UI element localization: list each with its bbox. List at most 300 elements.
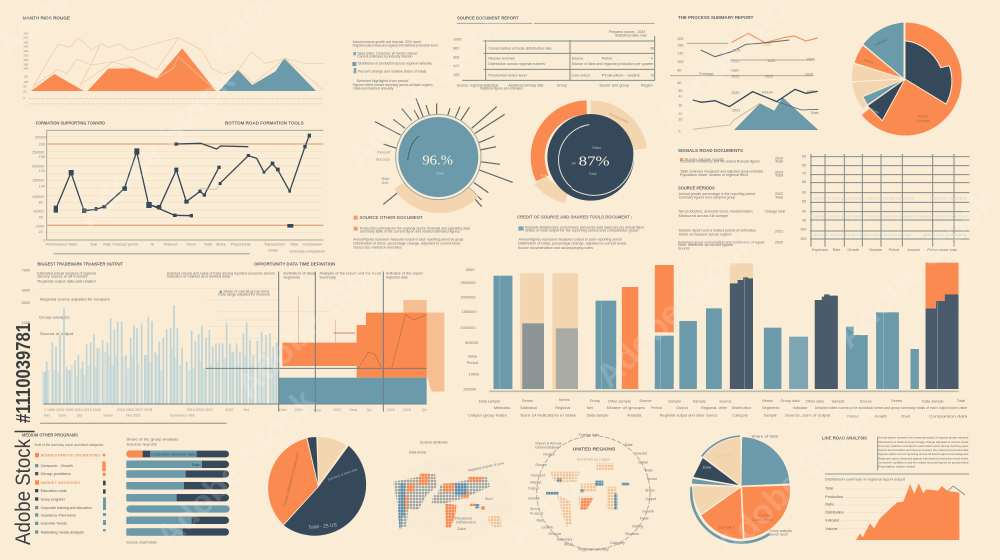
x labels: 2022 — [225, 408, 233, 412]
bar row 8 — [126, 528, 229, 536]
y labels: 1000000 — [461, 326, 475, 330]
spoke labels: Success — [376, 158, 390, 162]
headings: BOTTOM ROAD FORMATION TOOLS — [225, 120, 304, 126]
column rules — [279, 272, 383, 412]
legend left: Source documentation and notes — [353, 246, 402, 250]
teal land — [546, 478, 629, 509]
more entries: 2022 — [775, 192, 783, 196]
bars caption: Source chart totals — [126, 541, 157, 545]
left text block — [352, 40, 438, 90]
secondary bars — [43, 348, 275, 404]
bar 15 — [910, 349, 919, 389]
x labels: 2015 2016 2017 2018 — [117, 408, 152, 412]
legend: ADMINISTRATIVE OPERATIONS — [41, 452, 100, 457]
bar 11 — [789, 337, 808, 389]
top notes: Regional output data and related — [37, 279, 96, 283]
table text: % — [651, 73, 655, 77]
overlay line — [948, 486, 965, 495]
ring labels: Growth — [541, 525, 553, 529]
axis — [28, 97, 323, 100]
more entries: Net production, domestic trend, transformation — [679, 209, 753, 213]
top notes: Indicator of the report — [386, 271, 423, 275]
y labels: 300 — [800, 228, 806, 232]
panel: bottom right pie — [691, 434, 792, 543]
legend right: CREDIT OF SOURCE AND SHARED TOOLS DOCUMENT : — [517, 215, 633, 220]
x labels: Amount — [907, 248, 920, 252]
x labels: Detailed notes covering the statistical series and group summary totals of each output index value — [815, 406, 967, 410]
navy slice — [867, 79, 905, 121]
x labels: Data sample — [587, 414, 608, 418]
x labels: Statistical — [520, 406, 537, 410]
pie labels: Data — [703, 465, 712, 470]
pie labels: Annual — [918, 114, 929, 118]
segment labels: Annual share — [608, 112, 629, 124]
tan land — [488, 515, 502, 527]
more entries: Total — [775, 196, 783, 200]
heading: MEDIUM OTHER PROGRAMS — [22, 433, 79, 439]
tan slice lower — [852, 79, 905, 109]
faint row labels: period values — [923, 233, 967, 237]
ring labels: Import & Annual — [535, 442, 562, 446]
ring labels: Regional summary — [578, 548, 609, 552]
x axis labels: Summary comparison — [289, 250, 325, 254]
bar 7 — [679, 321, 697, 389]
entries — [680, 156, 783, 178]
pie notes: Group analysis — [769, 529, 792, 533]
grey land — [393, 473, 490, 527]
panel: bar column chart and blocks — [22, 261, 444, 423]
y labels: 3000 — [22, 289, 30, 293]
ring — [537, 436, 650, 549]
tan slice — [693, 486, 741, 514]
top notes: Estimated annual measure of regional — [37, 271, 96, 275]
stock id text — [12, 323, 35, 545]
gauge captions — [572, 146, 601, 176]
bar row 3 — [126, 470, 229, 478]
legend: Insurance Premiums — [41, 512, 76, 517]
faint row labels: sample record group entries noted across period values measured in grid range rows — [814, 214, 968, 218]
pie notes: Source report — [769, 533, 788, 537]
y axis numbers: 240 — [23, 45, 29, 49]
x axis labels: Detail — [268, 248, 278, 252]
stock id text: #1110039781 — [13, 323, 35, 423]
y labels: 70 — [802, 172, 806, 176]
headings: OPPORTUNITY DATA TIME DEFINITION — [254, 261, 336, 267]
y axis numbers: 260 — [23, 40, 29, 44]
x labels: Series — [522, 399, 533, 403]
map notes — [455, 461, 505, 531]
y axis numbers: Lorem ipsum dolor sit amet consectetur adipiscing elit sed do eiusmod tempor incididunt labore magna aliqua minim veniam quis nostrud exercitation ullamco laboris nisi aliquip commodo consequat duis aute irure dolor — [27, 101, 323, 105]
x axis labels: Total — [290, 242, 298, 246]
bar 16 stacked — [926, 263, 959, 389]
chart labels: Rate — [811, 111, 819, 115]
x labels: Series — [762, 399, 773, 403]
more entries: Summary figures from sampled group — [679, 196, 735, 200]
entries: Table summary measured and adjusted group estimate — [680, 169, 763, 173]
navy line lower — [693, 89, 818, 107]
top notes: Summary — [319, 275, 336, 279]
data series — [54, 134, 311, 228]
text block: Summary statistics recorded for each listed sector during reporting years — [878, 444, 969, 448]
stipple background — [393, 457, 513, 540]
entries: 2023 — [775, 170, 783, 174]
x labels: 2021 — [333, 408, 341, 412]
stock id text: Adobe Stock | — [12, 429, 35, 545]
y axis labels: 20 — [39, 230, 43, 234]
y axis numbers: 220 — [23, 49, 29, 53]
bar row 2: Ratio — [192, 463, 201, 467]
more entries: 2021 — [775, 229, 783, 233]
watermark: Adobe — [499, 454, 600, 556]
watermark: Adobe Stock — [69, 62, 243, 236]
orange slice left — [701, 487, 743, 539]
top notes: Source of output — [40, 332, 73, 336]
x labels: Qty — [77, 414, 83, 418]
y axis labels: 200000 — [32, 165, 44, 169]
ring labels: Services — [625, 532, 639, 536]
x labels: Other data — [806, 400, 825, 404]
y axis labels: 80 — [39, 200, 43, 204]
orange small slice — [854, 45, 904, 79]
chart labels: 2020 — [731, 91, 739, 95]
table text: Distribution across regional markets — [488, 62, 545, 66]
x labels: Set — [243, 408, 249, 412]
pie notes — [751, 434, 792, 537]
y axis numbers: 100 — [23, 80, 29, 84]
teal small slice — [692, 478, 740, 486]
y axis labels: 150000 — [32, 179, 44, 183]
y axis labels: 300 — [23, 31, 29, 35]
table text: 800 — [453, 47, 459, 51]
x axis labels: Planned — [164, 242, 177, 246]
table text: 400 — [453, 64, 459, 68]
top notes: Segments — [283, 275, 300, 279]
heading: SOURCE DOCUMENT REPORT — [457, 15, 519, 21]
teal land — [398, 483, 479, 528]
more entries — [678, 192, 785, 250]
ring labels: Share — [645, 489, 655, 493]
x axis labels: Share — [216, 242, 226, 246]
teal area — [219, 58, 316, 91]
teal mountain — [734, 97, 818, 130]
panel: horizontal bars and legend — [22, 433, 230, 545]
pie labels — [703, 453, 774, 529]
panel: top-right line charts — [670, 15, 819, 133]
segment labels — [540, 112, 629, 182]
y axis labels: 200 — [39, 142, 45, 146]
heading: THE PROCESS SUMMARY REPORT — [678, 15, 753, 21]
tan slice upper — [703, 437, 741, 486]
panel: text legends under gauges — [353, 215, 644, 250]
chart labels: 20 — [678, 112, 682, 116]
panel: right grid chart — [800, 154, 969, 252]
block bracket and rules — [825, 437, 969, 474]
chart labels: 100 — [677, 60, 683, 64]
navy large slice — [283, 445, 366, 536]
grid lines — [811, 154, 954, 247]
legend left: SOURCE OTHER DOCUMENT — [359, 215, 423, 220]
x labels: Data — [279, 408, 288, 412]
watermark: Adobe Stock — [149, 382, 323, 556]
table text: Production index level — [488, 73, 527, 77]
orange line — [732, 33, 818, 43]
orange land — [403, 473, 485, 527]
teal slice — [741, 437, 790, 486]
thin trend lines — [32, 38, 323, 90]
x labels: Share of groups — [606, 406, 645, 410]
map notes: Data — [457, 527, 467, 531]
map notes: Sum — [485, 497, 493, 501]
text block: Distribution of totals and percentage change adjusted to current levels — [878, 440, 969, 444]
table text: Production - metric — [602, 73, 640, 77]
faint row labels: sample record group entries noted across period values — [814, 196, 914, 200]
bar 6 stacked — [655, 265, 674, 389]
y axis numbers — [23, 36, 323, 105]
y labels — [800, 154, 806, 241]
legend: Marketing media analysis — [41, 529, 84, 534]
x labels: Net 2021 — [126, 414, 141, 418]
ring labels: Detail — [638, 460, 648, 464]
y labels: 55 — [802, 200, 806, 204]
gauge captions: Total — [589, 172, 597, 176]
y labels: Value — [468, 354, 477, 358]
chart labels: 40 — [678, 94, 682, 98]
heading: LINE ROAD ANALYSIS — [822, 436, 868, 442]
y labels: 60 — [802, 190, 806, 194]
entries: 2024 — [775, 156, 783, 160]
table text: Statistical data note — [615, 33, 647, 37]
legend: Executive Trends — [41, 521, 67, 526]
table text: 08 — [650, 46, 654, 50]
primary bars — [45, 305, 277, 404]
spoke labels — [376, 151, 390, 185]
x labels: Indicator — [793, 406, 808, 410]
subheading: Distribution summary of regional report output — [825, 478, 905, 482]
chart labels: 2023 — [765, 74, 773, 78]
y labels: 2000000 — [461, 296, 475, 300]
teal disc — [398, 117, 478, 197]
ring labels: Demonstration — [535, 446, 559, 450]
ring labels: Market — [530, 480, 542, 484]
entries: Consumer confidence and the related financial figures — [680, 160, 760, 164]
x labels: Number — [869, 248, 883, 252]
left text block: Data summarized annually — [353, 86, 393, 90]
x labels: Series — [891, 399, 902, 403]
legend: Consumer - Growth — [41, 463, 73, 468]
more entries: Summary group consumption and distribution of report — [678, 240, 764, 244]
x labels: Sample — [693, 400, 706, 404]
pie labels: Group distribution of totals and — [282, 452, 300, 506]
bar row 2 — [126, 461, 229, 468]
table text: Statistical figures and estimated — [480, 86, 523, 90]
panel: dark donut gauge — [538, 107, 640, 201]
x labels: Period — [651, 406, 662, 410]
chart labels: 2019 — [732, 49, 740, 53]
x labels: Other sample — [608, 400, 631, 404]
top notes: Definition of data — [283, 271, 316, 275]
panel: bottom right text and area chart — [822, 436, 969, 540]
reference lines — [47, 144, 323, 225]
bars heading: Source reports — [126, 443, 157, 447]
spoke labels: Percent — [377, 151, 390, 155]
y labels: 1000 — [22, 321, 30, 325]
top notes: Indicator of market and related data — [167, 274, 231, 278]
x labels: Group — [590, 399, 600, 403]
x labels: Regional, other — [701, 406, 728, 410]
y axis labels: 150 — [39, 155, 45, 159]
x labels: Net — [587, 406, 594, 410]
x labels: Growth — [874, 415, 887, 419]
x labels: Data sample — [479, 400, 500, 404]
x axis labels: Trend — [186, 242, 195, 246]
faint row labels — [814, 196, 968, 237]
x labels: Sample — [764, 414, 777, 418]
table text: Prepared source - 2024 — [609, 30, 645, 34]
y axis labels: 100 — [39, 184, 45, 188]
tan segment lower — [540, 180, 567, 197]
table text: Group — [557, 83, 567, 87]
x labels: Distribution — [732, 406, 751, 410]
table text: Additional summary data — [508, 83, 544, 87]
navy line upper — [701, 40, 789, 57]
side labels: Indicator — [825, 519, 840, 523]
dotted guides — [837, 489, 913, 529]
ring labels: Foreign data — [579, 433, 600, 437]
y labels: Period — [467, 361, 478, 365]
x labels: Net — [44, 414, 50, 418]
faint row labels: sample record group entries noted across period — [814, 233, 911, 237]
panel: top-left area chart — [23, 16, 323, 99]
radial spokes — [375, 98, 513, 207]
y axis numbers: 180 — [23, 58, 29, 62]
faint bar chart rows — [37, 288, 330, 338]
bar 2 stacked — [520, 273, 544, 389]
x axis labels: Transactions — [264, 242, 285, 246]
y labels: 45 — [802, 218, 806, 222]
map labels: Dynamic distribution — [420, 441, 448, 445]
top notes — [37, 271, 423, 336]
chart labels: 2025 — [805, 73, 813, 77]
heading rules — [457, 22, 655, 25]
inner arcs — [559, 125, 589, 188]
more entries: Sample report and a related period of estimates — [679, 229, 756, 233]
x labels: Group data — [780, 399, 801, 403]
table text: 4 — [651, 56, 653, 60]
watermark: Adobe Stock — [589, 222, 763, 396]
legend: Corporate training and education — [41, 505, 92, 510]
table text: Source — [572, 56, 583, 60]
frame — [47, 130, 323, 240]
y labels: 200 — [800, 237, 806, 241]
x labels: Period — [889, 248, 899, 252]
orange segment — [538, 107, 587, 178]
panel: teal radial gauge — [375, 98, 513, 207]
ring labels: Source — [535, 463, 547, 467]
y axis numbers: 120 — [23, 75, 29, 79]
y labels: 40 — [802, 210, 806, 214]
legend left: Annual figures represent measured output in each reporting period by group — [353, 238, 463, 242]
headings: BIGGEST TRADEMARK TRANSFER OUTPUT — [37, 261, 123, 267]
bars heading: Share of the group analysis — [126, 437, 179, 441]
x labels: Performance total — [927, 248, 957, 252]
pie labels: Total data — [714, 453, 732, 458]
side labels: Volume — [825, 527, 838, 531]
navy thin slice — [307, 437, 318, 487]
y labels: 65 — [802, 180, 806, 184]
bar row 7 — [126, 517, 229, 524]
chart labels: Gain — [731, 69, 739, 73]
panel: dotted world map — [393, 441, 513, 540]
x labels: Period — [847, 415, 858, 419]
side labels: Total — [825, 487, 833, 491]
x labels: Chart — [901, 415, 911, 419]
pie notes: Share of total — [751, 434, 778, 438]
top notes: Survey source of all industry — [37, 274, 88, 278]
pie labels: Others — [863, 58, 874, 65]
horizontal lines — [810, 157, 969, 239]
text block: Annual figures represent the measured output of regional groups reported — [878, 436, 969, 440]
y labels: 10000 — [469, 372, 479, 376]
table text: Consumption of local distribution rate — [488, 46, 552, 50]
ring labels: Demand — [531, 474, 545, 478]
secondary lines — [693, 103, 760, 129]
legend: Group programs — [41, 496, 65, 501]
bar 12 — [815, 294, 838, 389]
ring labels: Output — [528, 487, 539, 491]
legend left: Production estimated in the regional sector, financial and operating data — [360, 226, 471, 230]
chart labels: 120 — [677, 51, 683, 55]
orange area chart — [856, 483, 959, 540]
orange area large — [87, 48, 216, 91]
segment labels: Rate — [540, 174, 548, 178]
ring labels — [528, 433, 658, 552]
ring labels: Region — [543, 452, 555, 456]
x labels: Rate — [833, 248, 840, 252]
spoke labels: Unit — [382, 181, 388, 185]
x labels: Regional — [555, 406, 571, 410]
left text block: Distribution of production across regional networks — [358, 61, 432, 65]
legend right: Annual figures represent measured output in each reporting period — [519, 238, 622, 242]
headings: FORMATION SUPPORTING TOWARD — [36, 120, 105, 126]
more entries: Change total — [764, 209, 785, 213]
chart labels: 2021 — [731, 74, 739, 78]
y labels: 7000 — [22, 268, 30, 272]
panel: circular world map — [528, 433, 658, 552]
table text: Region — [641, 83, 653, 87]
pie labels: Share — [870, 107, 879, 115]
x axis labels: Rate — [103, 242, 111, 246]
text block: Population share noted — [878, 465, 915, 469]
x labels: Source — [639, 399, 652, 403]
panel: large bar chart — [461, 263, 969, 419]
table text: 600 — [453, 55, 459, 59]
ring labels: Volume — [528, 496, 540, 500]
subheading: Note of the summary report and listed categories — [35, 443, 103, 447]
map notes: Distribution — [456, 520, 476, 524]
y axis labels: 50000 — [33, 210, 44, 214]
bar row 5 — [126, 494, 229, 501]
table text — [453, 30, 655, 90]
pie labels — [282, 452, 358, 531]
navy disc — [547, 114, 634, 201]
y labels — [22, 268, 30, 325]
ring labels: Sector — [647, 477, 658, 481]
legend left — [353, 215, 471, 250]
top notes: Adjusted data — [386, 275, 409, 279]
ring labels: Summary — [557, 537, 572, 541]
navy large slice — [905, 41, 952, 104]
y axis numbers: 160 — [23, 62, 29, 66]
